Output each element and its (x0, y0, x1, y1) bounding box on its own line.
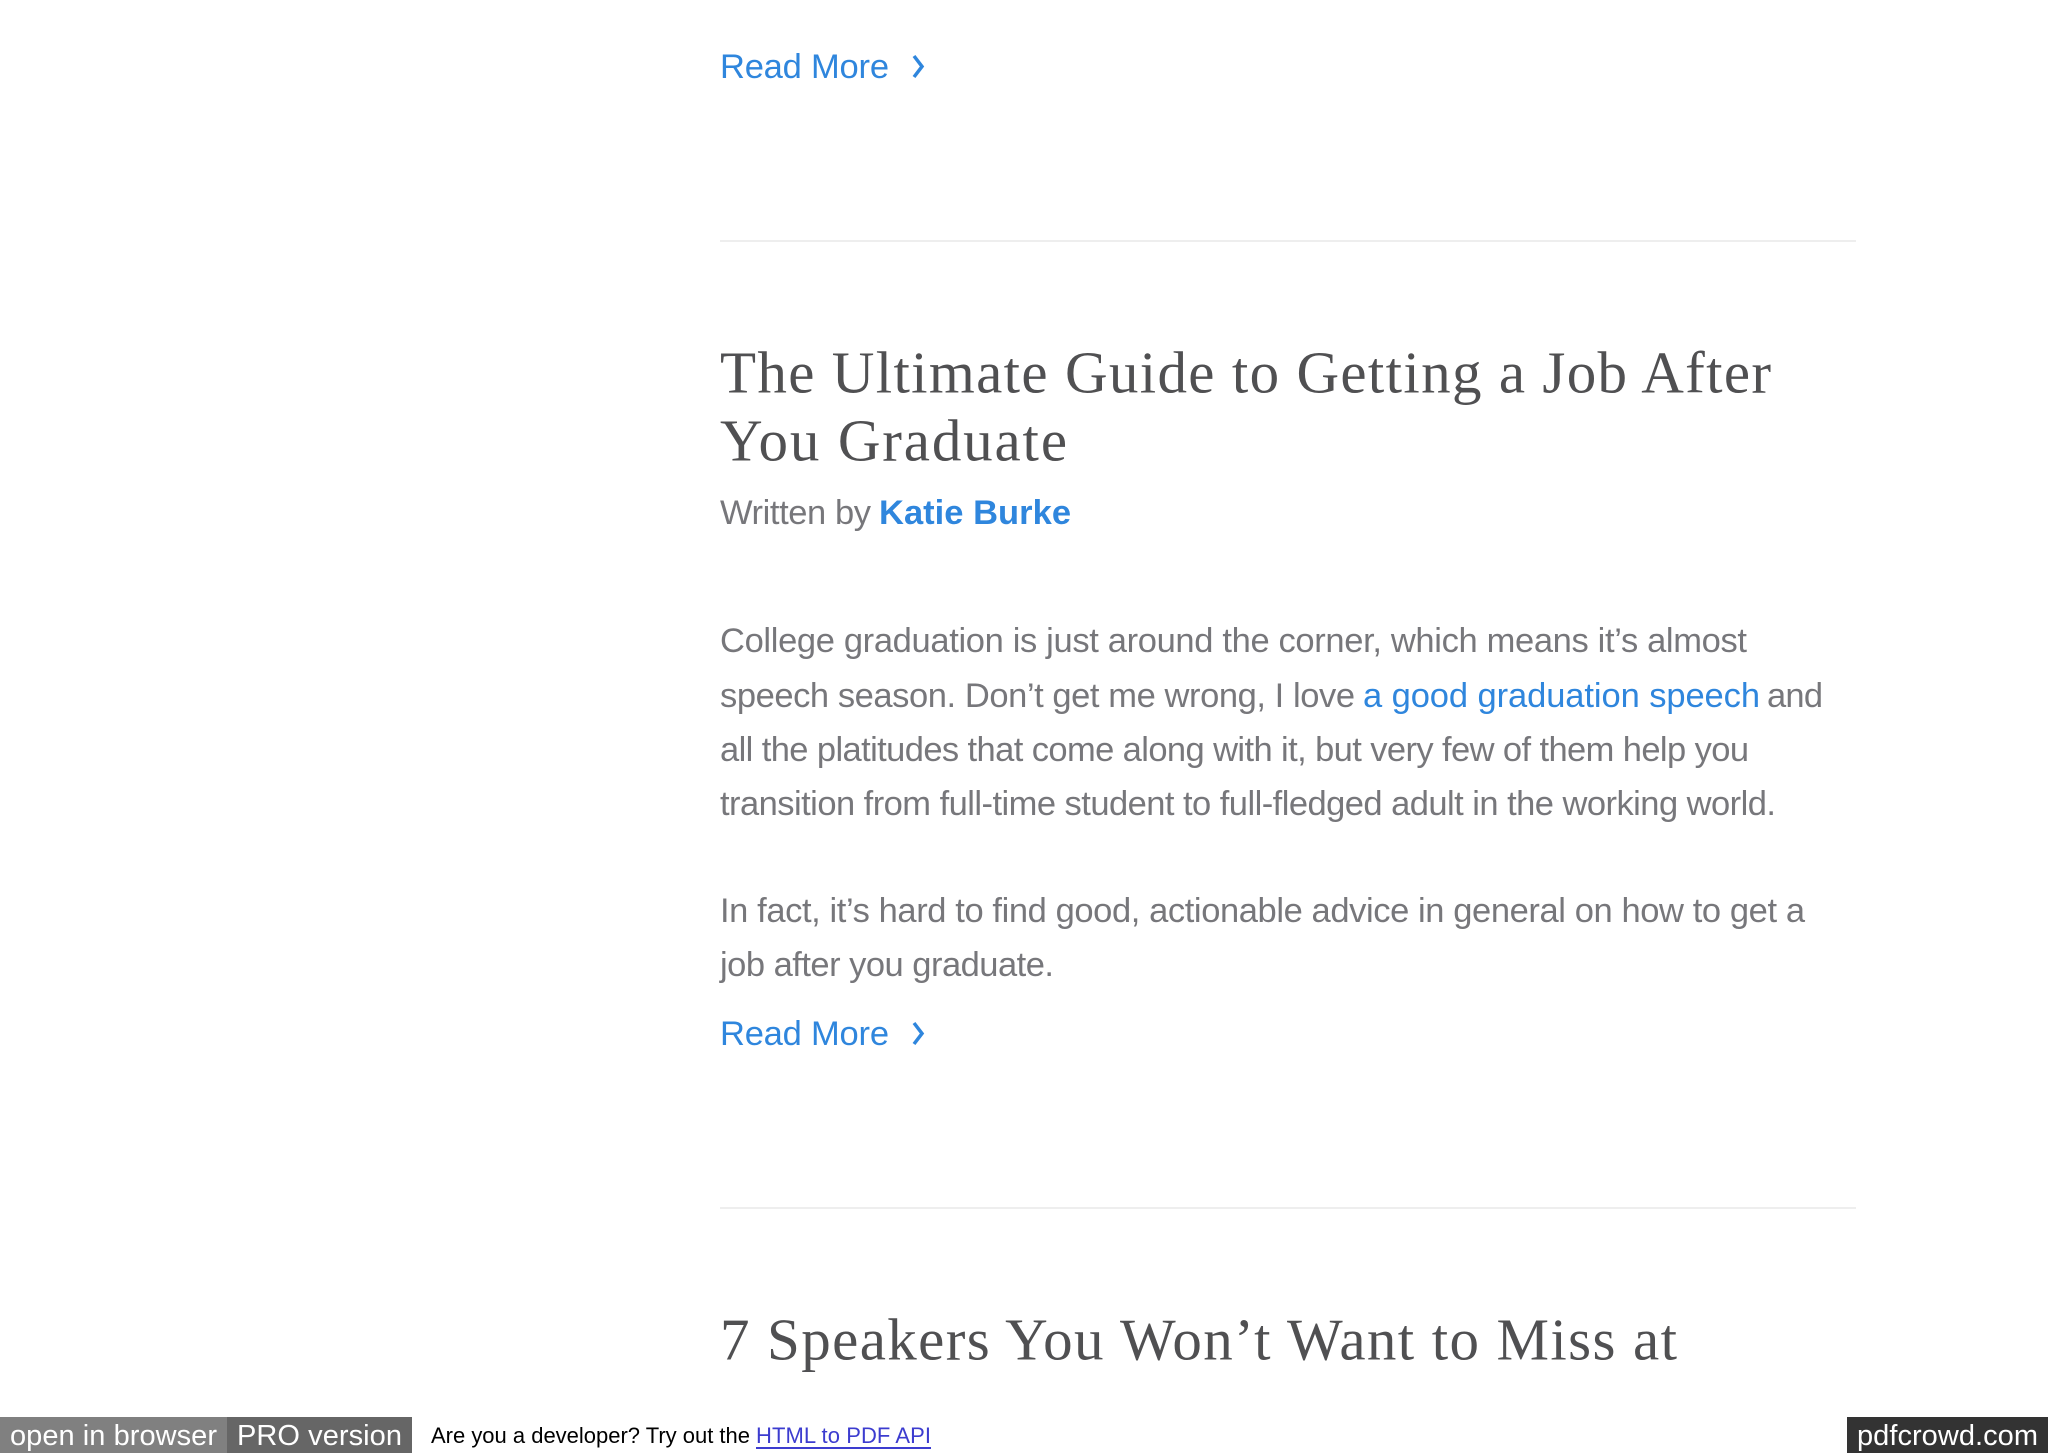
byline (720, 494, 1071, 532)
article heading: The Ultimate Guide (720, 340, 1771, 474)
footer developer prompt: Are you a developer? Try out the (431, 1423, 750, 1448)
footer badge: pdfcrowd.com: pdfcrowd.com (1857, 1420, 2038, 1452)
icon: chevron arrow (914, 56, 922, 77)
icon: chevron arrow (914, 1023, 922, 1044)
footer developer prompt: HTML to PDF API (756, 1423, 931, 1448)
footer button: PRO version: PRO version (237, 1420, 402, 1452)
footer button: open in browser: open in browser (10, 1420, 217, 1452)
read more link: current article: Read More (720, 1015, 889, 1053)
article heading: 7 Speakers: 7 Speakers You Won’t Want to Miss at (720, 1306, 1678, 1372)
article body paragraph 2: In fact, it’s hard to find good, actionable advice in general on how to get a (720, 892, 1806, 930)
byline: Katie Burke (879, 494, 1071, 532)
article body paragraph 1: and (1767, 677, 1823, 715)
article heading: The Ultimate Guide: You Graduate (720, 408, 1067, 474)
article body paragraph 1: speech season. Don’t get me wrong, I love (720, 677, 1355, 715)
byline: Written by (720, 494, 872, 532)
article body paragraph 1: a good graduation speech (1363, 677, 1760, 715)
article body paragraph 1: transition from full-time student to full-fledged adult in the working world. (720, 785, 1776, 823)
article body paragraph 1: all the platitudes that come along with it, but very few of them help you (720, 731, 1749, 769)
article body paragraph 1 (720, 622, 1823, 823)
article body paragraph 1: College graduation is just around the corner, which means it’s almost (720, 622, 1747, 660)
read more link: previous article: Read More (720, 48, 889, 86)
article body paragraph 2 (719, 892, 1806, 984)
article heading: The Ultimate Guide: The Ultimate Guide to Getting a Job After (720, 340, 1771, 406)
footer developer prompt (431, 1423, 931, 1449)
article body paragraph 2: job after you graduate. (719, 946, 1054, 984)
